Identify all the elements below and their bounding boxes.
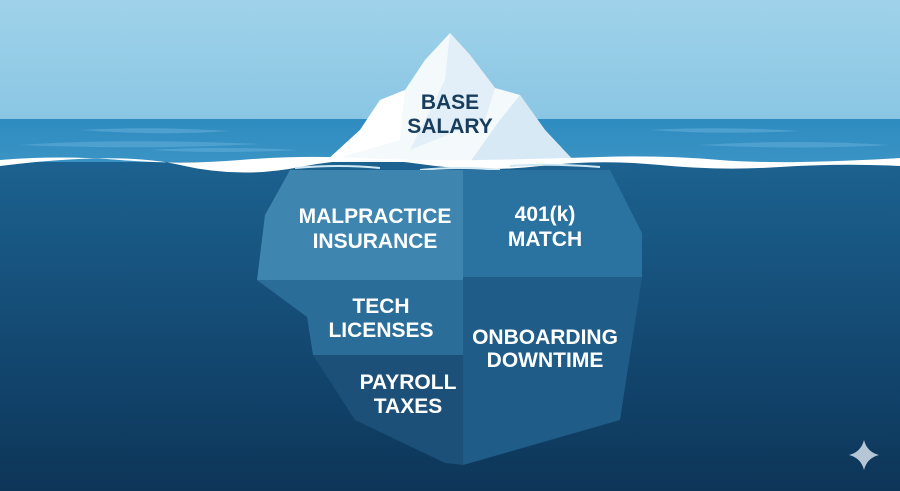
wave line [0,156,900,173]
section: tech licenses [257,280,463,355]
labels: DOWNTIME [487,349,603,372]
labels: INSURANCE [313,230,437,253]
labels: TAXES [374,395,442,418]
section: onboarding downtime [463,277,642,465]
labels: MATCH [508,228,582,251]
label: base salary: SALARY [407,115,493,138]
labels: PAYROLL [360,371,457,394]
submerged iceberg [257,170,642,465]
section: malpractice insurance [257,170,463,280]
iceberg tip [325,33,575,162]
underwater [0,162,900,491]
labels [299,203,618,418]
icon: sparkle [849,440,879,470]
label: base salary [407,91,493,138]
labels: TECH [352,295,410,318]
labels: LICENSES [328,319,434,342]
sky [0,0,900,120]
label: base salary: BASE [421,91,479,114]
section: payroll taxes [313,355,463,465]
labels: 401(k) [515,203,575,226]
section: 401k match [463,170,642,277]
labels: ONBOARDING [472,326,618,349]
labels: MALPRACTICE [299,205,451,228]
sea surface [0,119,900,164]
